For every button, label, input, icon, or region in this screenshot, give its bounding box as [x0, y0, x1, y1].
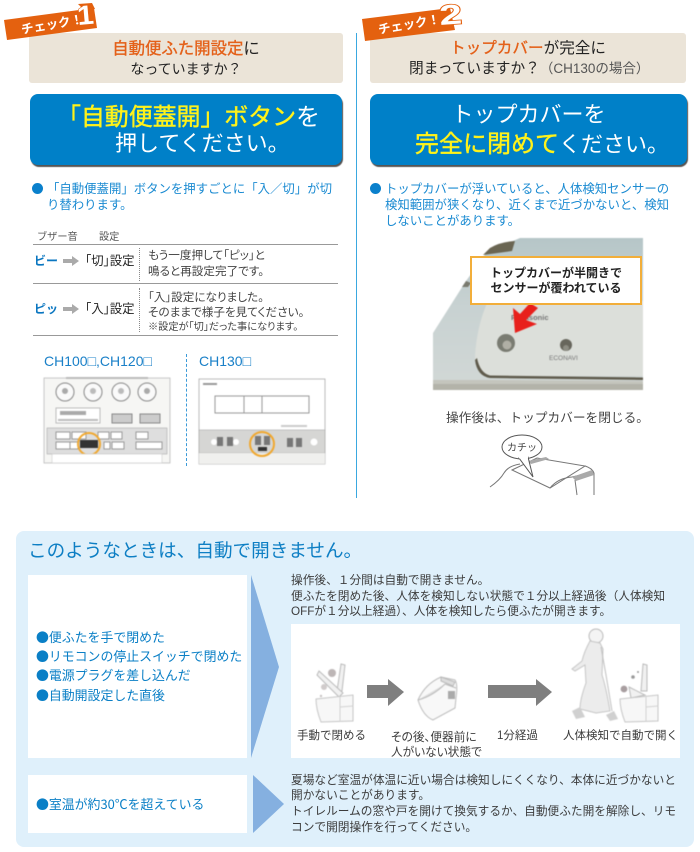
instruction box: check 1 — [30, 94, 342, 165]
badge: check 1 — [4, 0, 97, 40]
row 1 setting: 「切」設定 — [85, 254, 135, 268]
question line 1: トップカバーが完全に — [450, 40, 606, 57]
arrow: causes to explanation — [251, 575, 279, 758]
vertical divider between check 1 and check 2 — [356, 33, 357, 498]
heading box: check 1 question — [29, 33, 343, 83]
table header: setting: 設定 — [99, 232, 119, 243]
photo: toilet sensor with half-open top cover — [432, 238, 644, 390]
step label 1: 手動で閉める — [297, 730, 366, 742]
model label: CH130: CH130□ — [199, 353, 251, 369]
diagram panel: sequence — [291, 624, 680, 758]
photo: toilet sensor with half-open top cover: ECONAVI — [549, 355, 578, 362]
table header: buzzer: ブザー音 — [37, 232, 78, 243]
temperature cause: ●室温が約30℃を超えている — [36, 794, 204, 813]
note line 3: しないことがあります。 — [385, 214, 520, 228]
explanation text — [291, 574, 665, 618]
temperature line 4: コンで開閉操作を行ってください。 — [291, 821, 477, 834]
callout line 1: トップカバーが半開きで — [490, 266, 622, 280]
badge: check 2: チェック！ — [377, 12, 441, 37]
bullet note: check 2 — [370, 182, 669, 228]
arrow: step 2 to step 3 — [488, 679, 552, 706]
note line 1: トップカバーが浮いていると、人体検知センサーの — [385, 182, 669, 196]
model label: CH100 CH120: CH100□,CH120□ — [44, 353, 152, 369]
bullet dot — [32, 183, 43, 194]
row 1 description: 鳴ると再設定完了です。 — [148, 265, 264, 278]
bullet dot — [370, 183, 381, 194]
panel: check 2 — [362, 0, 689, 228]
note line 2: り替わります。 — [47, 198, 132, 212]
question line 2: なっていますか？ — [130, 61, 242, 77]
icon: closed toilet — [417, 676, 458, 721]
panel: check 1 — [4, 0, 344, 466]
temperature explanation text — [291, 774, 676, 834]
step label 2: 人がいない状態で — [391, 746, 482, 759]
photo: toilet sensor with half-open top cover: Panasonic — [511, 313, 549, 322]
step label 2: その後、便器前に — [391, 731, 477, 744]
caption: close the top cover: 操作後は、トップカバーを閉じる。 — [446, 411, 649, 425]
question line 2: 閉まっていますか？（CH130の場合） — [409, 61, 649, 77]
note line 1: 「自動便蓋開」ボタンを押すごとに「入／切」が切 — [47, 182, 332, 196]
step label 4: 人体検知で自動で開く — [563, 730, 678, 742]
instruction line 2: 完全に閉めてください。 — [415, 131, 669, 158]
step label 2 — [391, 730, 482, 759]
condition box: room temperature — [28, 775, 247, 833]
explanation line 3: OFFが１分以上経過）、人体を検知したら便ふたが開きます。 — [291, 605, 611, 618]
badge: check 1: チェック！ — [20, 12, 84, 37]
row 1 description: もう一度押して「ピッ」と — [148, 249, 265, 262]
badge: check 1: 1 — [76, 0, 95, 32]
bullet note: check 1 — [32, 182, 332, 212]
illustration: closing the top cover with a click — [490, 434, 594, 496]
icon: toilet with lid closing by hand — [315, 663, 354, 723]
temperature line 1: 夏場など室温が体温に近い場合は検知しにくくなり、本体に近づかないと — [291, 774, 676, 787]
panel: when the lid does not open automatically — [16, 531, 694, 847]
illustration: closing the top cover with a click: カチッ — [507, 442, 537, 454]
callout line 2: センサーが覆われている — [490, 281, 622, 295]
step label 3: 1分経過 — [497, 730, 538, 742]
question line 1: 自動便ふた開設定に — [112, 40, 260, 58]
instruction box: check 2 — [370, 94, 687, 165]
callout: half-open top cover — [470, 256, 642, 305]
panel title: このようなときは、自動で開きません。 — [28, 540, 362, 561]
instruction line 1: 「自動便蓋開」ボタンを — [57, 104, 320, 131]
row 2 setting: 「入」設定 — [85, 302, 135, 316]
row 2 footnote: ※設定が「切」だった事になります。 — [148, 322, 298, 333]
explanation line 1: 操作後、１分間は自動で開きません。 — [291, 574, 489, 587]
instruction line 1: トップカバーを — [451, 102, 606, 127]
condition box: four causes — [28, 575, 247, 758]
row 1 sound: ビー — [34, 254, 58, 268]
instruction line 2: 押してください。 — [115, 131, 290, 156]
cause 4: ●自動開設定した直後 — [36, 685, 165, 704]
row 1 description — [148, 249, 265, 278]
heading box: check 2 question — [370, 33, 686, 83]
cause 2: ●リモコンの停止スイッチで閉めた — [36, 646, 242, 665]
row 2 description — [148, 291, 304, 319]
explanation line 2: 便ふたを閉めた後、人体を検知しない状態で１分以上経過後（人体検知 — [291, 590, 665, 603]
arrow: temperature to explanation — [253, 775, 284, 833]
remote control: CH100 CH120 — [43, 376, 171, 464]
temperature line 3: トイレルームの窓や戸を開けて換気するか、自動便ふた開を解除し、リモ — [291, 805, 676, 818]
note line 2: 検知範囲が狭くなり、近くまで近づかないと、検知 — [385, 198, 669, 212]
icon: toilet lid opening automatically — [619, 663, 659, 723]
cause 3: ●電源プラグを差し込んだ — [36, 665, 191, 684]
cause 1: ●便ふたを手で閉めた — [36, 627, 165, 646]
row 2 description: 「入」設定になりました。 — [148, 291, 264, 304]
table: buzzer sound and setting — [33, 231, 338, 336]
row 2 description: そのままで様子を見てください。 — [148, 306, 304, 319]
temperature line 2: 開かないことがあります。 — [291, 789, 430, 802]
row 1 arrow — [63, 256, 79, 266]
row 2 sound: ピッ — [34, 302, 58, 316]
remote control: CH130 — [198, 378, 326, 465]
icon: person walking — [571, 628, 618, 722]
arrow: step 1 to step 2 — [367, 679, 404, 706]
row 2 arrow — [63, 304, 79, 314]
badge: check 2 — [362, 0, 463, 41]
